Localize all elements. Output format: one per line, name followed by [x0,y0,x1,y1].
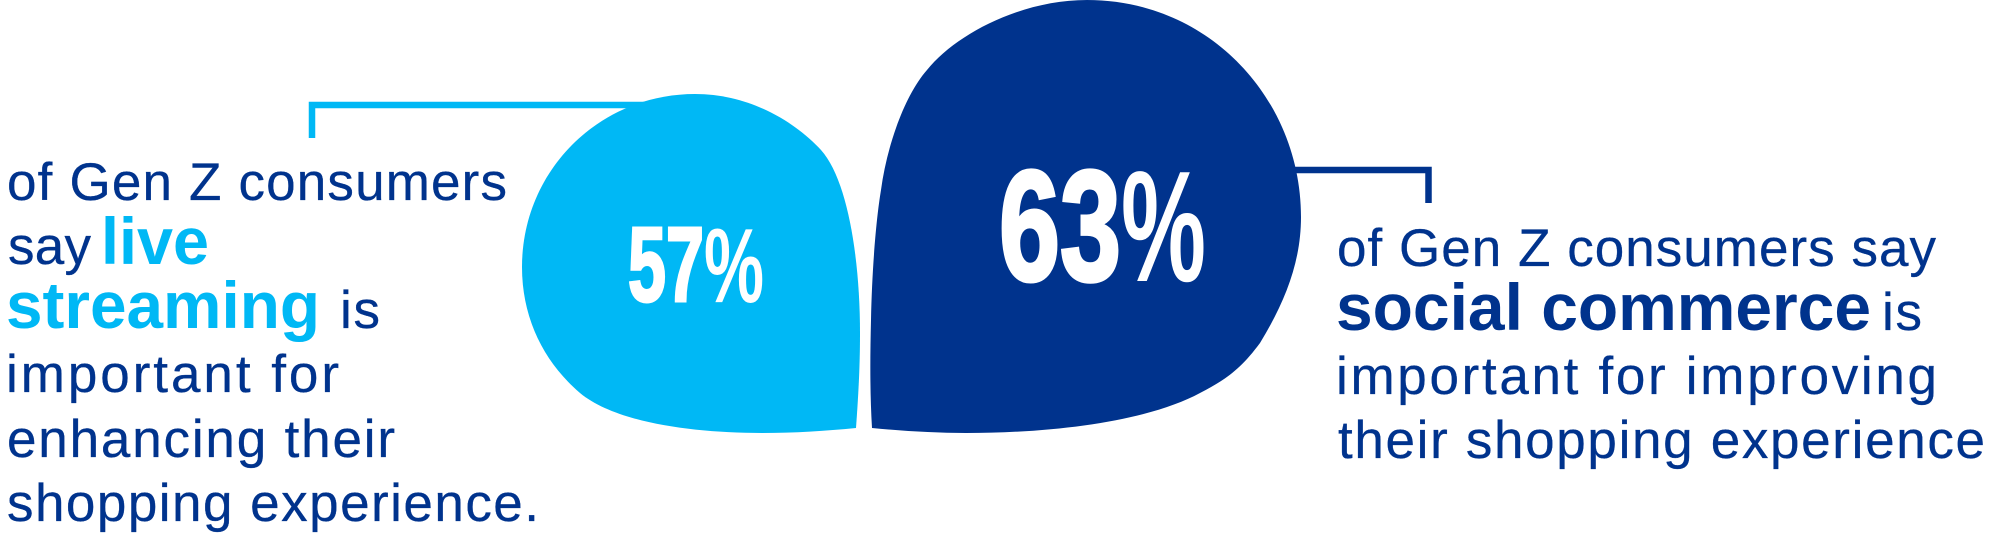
text block: live streaming: shopping experience. [7,474,539,533]
text block: live streaming: enhancing their [7,410,395,469]
text block: live streaming: is [340,281,380,340]
blob: 63% dark blue [870,0,1301,433]
stat: 63%: 63 [999,139,1121,314]
text block: live streaming: say [8,217,92,276]
text block: social commerce: of Gen Z consumers say [1337,219,1936,278]
text block: social commerce: their shopping experience [1338,411,1985,470]
connector: live streaming [312,105,660,138]
connector: social commerce [1295,170,1428,203]
blob: 57% light blue [522,94,860,433]
text block: social commerce [1336,219,1985,470]
stat: 57%: % [704,207,764,325]
text block: live streaming: important for [6,345,339,404]
text block: social commerce: is [1882,283,1922,342]
text block: live streaming: live [101,204,209,278]
text block: live streaming: streaming [6,268,320,342]
text block: live streaming [6,153,539,533]
text block: social commerce: important for improving [1336,347,1937,406]
text block: live streaming: of Gen Z consumers [7,153,507,212]
text block: social commerce: social commerce [1336,270,1871,344]
stat: 57%: 57 [628,206,704,324]
stat: 63%: % [1121,139,1206,315]
